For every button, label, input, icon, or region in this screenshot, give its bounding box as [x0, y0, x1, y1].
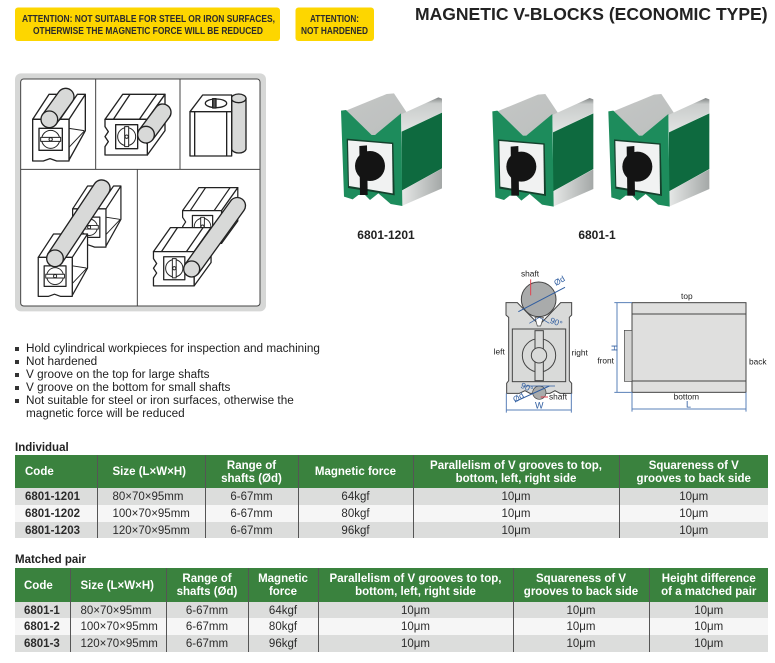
icon: pair of blocks with long shaft on side	[153, 188, 245, 286]
table: matched pair: Squareness of V	[536, 573, 626, 585]
table: matched pair: 80kgf	[269, 621, 297, 633]
feature list: V groove on the bottom for small shafts	[26, 381, 230, 394]
table: matched pair: 64kgf	[269, 604, 297, 616]
photo: 6801-1 first block	[492, 94, 593, 207]
table: individual: 6801-1203	[25, 524, 80, 536]
feature list: Hold cylindrical workpieces for inspection and machining	[26, 342, 320, 355]
table: individual: Magnetic force	[315, 466, 396, 478]
diagram: front view with shafts: W	[535, 401, 544, 411]
feature list: V groove on the top for large shafts	[26, 368, 210, 381]
diagram: front view with shafts: shaft	[521, 269, 540, 279]
table: matched pair: Parallelism of V grooves to top,	[330, 573, 501, 585]
table: matched pair: Size (L×W×H)	[80, 580, 154, 592]
icon: block standing against shaft	[190, 94, 246, 156]
table: individual: Code	[25, 466, 54, 478]
table: individual: 6-67mm	[230, 524, 273, 536]
table: matched pair: 80×70×95mm	[80, 604, 151, 616]
table: matched pair: of a matched pair	[661, 586, 756, 598]
table: individual: Parallelism of V grooves to top,	[430, 460, 602, 472]
table: matched pair: 120×70×95mm	[80, 638, 158, 650]
table: matched pair	[15, 568, 768, 652]
diagram: front view with shafts: right	[572, 347, 589, 357]
table: individual: 80kgf	[341, 508, 370, 520]
table: individual: 120×70×95mm	[112, 524, 190, 536]
diagram: side view: front	[597, 356, 615, 366]
table: individual: 6-67mm	[230, 491, 273, 503]
attention banner: not hardened	[296, 8, 374, 41]
table: individual: 10μm	[502, 491, 530, 503]
table: matched pair: Height difference	[662, 573, 756, 585]
photo: 6801-1 second block	[608, 94, 709, 207]
table: individual: grooves to back side	[637, 472, 751, 484]
table: individual: 10μm	[679, 491, 708, 503]
icon: pair of blocks supporting long shaft on top	[38, 180, 121, 296]
table: individual: 6801-1202	[25, 508, 80, 520]
table: matched pair: 10μm	[694, 604, 723, 616]
diagram: side view: bottom	[674, 392, 699, 402]
table: matched pair: 100×70×95mm	[80, 621, 158, 633]
table: matched pair: 10μm	[401, 638, 430, 650]
table: individual: 100×70×95mm	[112, 508, 190, 520]
table: matched pair: force	[269, 586, 297, 598]
diagram: front view with shafts: 90°	[519, 380, 535, 394]
table: individual: Range of	[227, 460, 276, 472]
table: matched pair: grooves to back side	[524, 586, 638, 598]
table: matched pair: 10μm	[694, 638, 723, 650]
table: individual: bottom, left, right side	[456, 472, 576, 484]
table: matched pair: shafts (Ød)	[177, 586, 237, 598]
table: matched pair: bottom, left, right side	[355, 586, 476, 598]
caption: 6801-1201: 6801-1201	[357, 228, 415, 242]
heading: individual: Individual	[15, 442, 69, 454]
table: matched pair: 10μm	[401, 604, 430, 616]
table: individual: 10μm	[502, 524, 530, 536]
diagram: front view with shafts: left	[494, 347, 505, 357]
technical diagrams	[494, 269, 767, 413]
table: individual: 96kgf	[341, 524, 370, 536]
title: MAGNETIC V-BLOCKS (ECONOMIC TYPE)	[415, 4, 768, 24]
table: individual: 80×70×95mm	[112, 491, 183, 503]
icon: block with shaft on top	[33, 88, 85, 161]
heading: matched pair: Matched pair	[15, 554, 86, 566]
diagram: side view: back	[749, 357, 767, 367]
panel: usage icons	[15, 73, 266, 312]
table: matched pair: 10μm	[566, 621, 596, 633]
table: individual: Size (L×W×H)	[112, 466, 186, 478]
feature list: Not suitable for steel or iron surfaces, otherwise the	[26, 394, 294, 407]
table: matched pair: 10μm	[566, 638, 596, 650]
table: matched pair: Code	[24, 580, 53, 592]
diagram: front view with shafts: Ød	[552, 273, 567, 288]
diagram: front view with shafts: 90°	[549, 315, 564, 329]
table: matched pair: Range of	[182, 573, 232, 585]
diagram: side view	[597, 291, 767, 412]
table: matched pair: 10μm	[694, 621, 723, 633]
diagram: side view: L	[686, 400, 691, 410]
table: matched pair: 10μm	[401, 621, 430, 633]
table: matched pair: 6801-3	[24, 638, 60, 650]
table: matched pair: 6-67mm	[186, 604, 228, 616]
table: matched pair: 6-67mm	[186, 638, 228, 650]
icon frame	[15, 73, 266, 311]
caption: 6801-1: 6801-1	[578, 228, 616, 242]
table: matched pair: 10μm	[566, 604, 596, 616]
table: matched pair: 6-67mm	[186, 621, 228, 633]
table: individual: 6801-1201	[25, 491, 80, 503]
table: individual: 10μm	[502, 508, 530, 520]
table: matched pair: 96kgf	[269, 638, 297, 650]
diagram: front view with shafts: Ød	[511, 390, 526, 404]
feature list: magnetic force will be reduced	[26, 407, 185, 420]
table: individual: 64kgf	[341, 491, 370, 503]
table: matched pair: 6801-1	[24, 604, 60, 616]
table: individual: shafts (Ød)	[221, 472, 282, 484]
attention banner: not suitable for steel	[15, 8, 280, 41]
product photos	[341, 93, 710, 207]
table: matched pair: 6801-2	[24, 621, 60, 633]
table: individual: 10μm	[679, 508, 708, 520]
feature list: Not hardened	[26, 355, 97, 368]
table: individual: 6-67mm	[230, 508, 273, 520]
table: individual: 10μm	[679, 524, 708, 536]
table: matched pair: Magnetic	[258, 573, 308, 585]
diagram: side view: H	[610, 345, 620, 351]
icon: block with shaft on side	[105, 94, 171, 155]
feature list	[15, 342, 320, 420]
attention banner: not hardened: ATTENTION:	[310, 13, 359, 25]
diagram: front view with shafts	[494, 269, 589, 413]
table: individual	[15, 455, 768, 538]
table: individual: Squareness of V	[649, 460, 739, 472]
diagram: front view with shafts: shaft	[549, 392, 568, 402]
photo: 6801-1201 block	[341, 93, 442, 206]
diagram: side view: top	[681, 291, 693, 301]
